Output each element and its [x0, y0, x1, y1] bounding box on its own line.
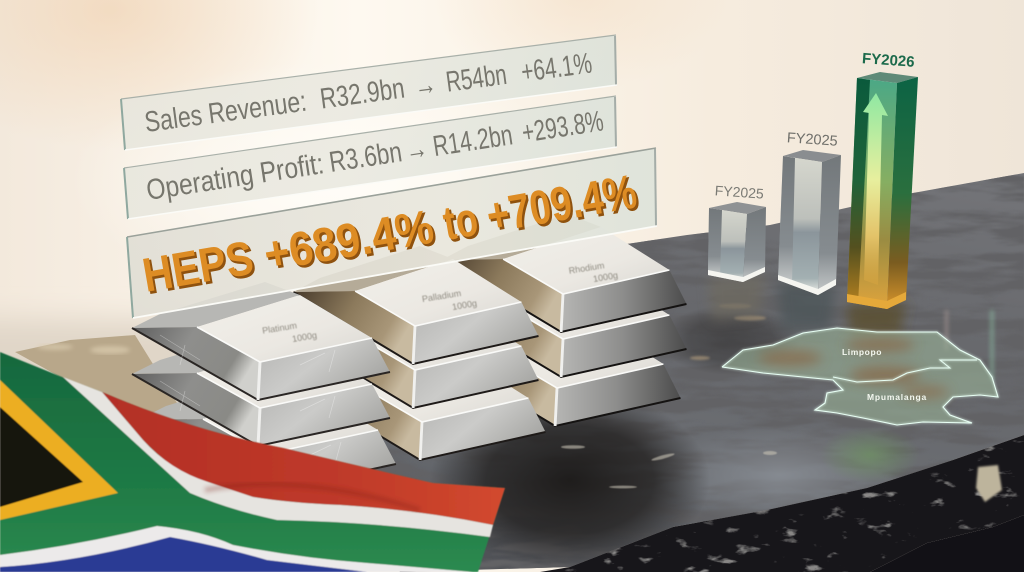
palladium bar top [293, 246, 538, 364]
bar stamp labels: Rhodium [568, 260, 605, 276]
flag: red band [102, 392, 505, 525]
label: FY2025 medium: FY2025 [786, 130, 838, 150]
text: operating profit: +293.8% [520, 105, 606, 149]
text: sales revenue [143, 48, 594, 139]
dark table under slab [870, 515, 1024, 572]
text: HEPS headline: +709.4% [483, 166, 641, 243]
rock slab: rough front side [540, 430, 1024, 572]
platinum bar top [132, 282, 390, 400]
South African flag [0, 352, 505, 572]
stack: palladium bars [293, 246, 546, 460]
glass panel: operating profit [124, 96, 617, 219]
flag: yellow chevron [0, 380, 118, 520]
text: operating profit: R3.6bn [327, 136, 404, 179]
map: province divider [833, 360, 977, 382]
map: province fill [722, 328, 998, 425]
text: sales revenue: +64.1% [519, 48, 594, 89]
map: province outline [722, 328, 998, 425]
rock slab: tan left end [15, 335, 200, 440]
column: large FY2026 [847, 50, 918, 309]
flag: lower white band [0, 526, 473, 572]
text: sales revenue: R32.9bn [318, 73, 407, 116]
map beams [945, 310, 994, 380]
rhodium bar middle [441, 259, 686, 377]
text: operating profit: R14.2bn [431, 119, 515, 163]
bar stamp labels: 1000g [291, 330, 318, 344]
flag: fold shadow [205, 484, 420, 510]
stack: platinum bars [132, 282, 396, 492]
bar stamp labels: 1000g [592, 270, 619, 284]
glass panel: sales revenue [121, 35, 617, 150]
text: HEPS shadow: +709.4% [485, 168, 643, 245]
rock slab: dark top surface [374, 173, 1024, 572]
flag: blue field [0, 537, 367, 572]
bar stamp labels: 1000g [451, 298, 478, 312]
column: medium FY2025 [778, 130, 841, 295]
flag: green field [0, 352, 505, 572]
rhodium bar bottom [435, 308, 680, 426]
column: small FY2025 [708, 182, 766, 282]
text: operating profit [144, 105, 606, 207]
palladium bar middle [293, 290, 538, 408]
text: HEPS shadow: to [441, 195, 484, 253]
label: Mpumalanga: Mpumalanga [867, 392, 927, 402]
text: HEPS shadow: HEPS [141, 234, 259, 305]
label: FY2026: FY2026 [862, 50, 915, 71]
palladium bar bottom [300, 342, 546, 460]
text: operating profit: Operating Profit: [144, 148, 326, 207]
column chart [708, 50, 918, 309]
text: HEPS headline: +689.4% [260, 201, 438, 282]
text: HEPS shadow: +689.4% [262, 203, 440, 284]
rhodium bar top [441, 214, 686, 332]
label: Limpopo: Limpopo [842, 347, 882, 357]
bar stamp labels [261, 260, 619, 344]
label: FY2025 small: FY2025 [714, 182, 765, 202]
bar stamp labels: Platinum [261, 320, 298, 336]
text: operating profit: → [403, 132, 430, 167]
text: HEPS headline [139, 166, 641, 303]
stack: rhodium bars [435, 214, 686, 426]
text: HEPS shadow [141, 168, 643, 305]
flag: black triangle [0, 407, 83, 507]
bar stamp labels: Palladium [421, 288, 462, 304]
platinum bar bottom [138, 374, 396, 492]
text: HEPS headline: to [439, 193, 482, 251]
icon: growth arrow [863, 93, 888, 285]
text: sales revenue: Sales Revenue: [143, 86, 308, 139]
flag: upper white band [63, 377, 493, 537]
holographic map [722, 310, 998, 425]
text: sales revenue: R54bn [444, 59, 509, 99]
platinum bar middle [132, 328, 390, 446]
text: HEPS headline: HEPS [139, 232, 257, 303]
column reflections on rock [708, 272, 906, 335]
text: sales revenue: → [412, 68, 438, 103]
glass panel: HEPS [127, 148, 657, 318]
